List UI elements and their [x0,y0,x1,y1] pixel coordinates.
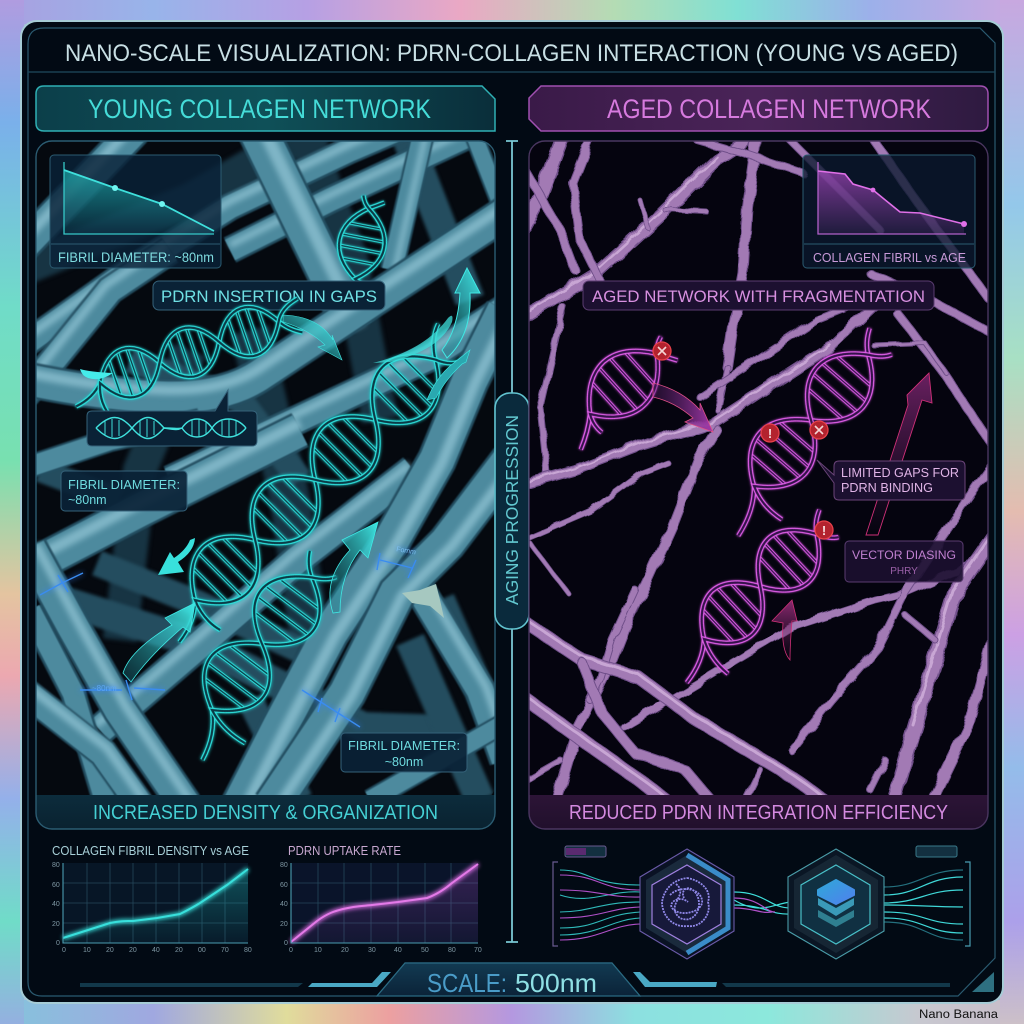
label: limited gaps: LIMITED GAPS FOR [841,466,959,480]
chart: collagen fibril density: 20 [52,921,60,928]
fibril image: dense teal fibres [36,142,494,795]
chart: PDRN uptake rate: 40 [394,947,402,954]
dna: upper left helix [63,290,312,421]
chart: collagen fibril density: COLLAGEN FIBRIL DENSITY vs AGE [52,843,249,858]
chart: collagen fibril density: 40 [52,901,60,908]
chart: PDRN uptake rate [280,843,482,954]
caption: young [36,141,495,829]
label: fibril diameter left [61,471,187,511]
panel: aged collagen network [520,135,995,829]
chart: collagen fibril density: 80 [244,947,252,954]
chart: PDRN uptake rate: 0 [284,940,288,947]
label: limited gaps [817,460,965,500]
caption: aged: REDUCED PDRN INTEGRATION EFFICIENCY [569,802,948,824]
chart: collagen fibril density: 20 [175,947,183,954]
label: vector: VECTOR DIASING [852,548,956,562]
panel header: young [36,86,495,131]
error badges: ! [822,523,826,538]
chart: collagen fibril density: 60 [52,882,60,889]
chart: PDRN uptake rate: 30 [368,947,376,954]
measurement marks: blue: ~80nm [92,684,117,693]
chart: PDRN uptake rate: 60 [280,882,288,889]
panel header: aged [529,86,988,131]
dna: aged helix 3 [653,500,859,698]
label: PDRN insertion [153,281,385,310]
chart: collagen fibril density [52,843,252,954]
chart: PDRN uptake rate: 80 [280,862,288,869]
scale badge: 500nm [515,968,597,998]
dna: aged helix 2 [700,319,914,550]
mini chart: collagen fibril vs age: COLLAGEN FIBRIL vs AGE [813,250,966,265]
label: aged network [583,281,934,310]
dna: lower helix [158,542,361,774]
mini chart: collagen fibril vs age [803,155,975,268]
chart: PDRN uptake rate: 20 [280,921,288,928]
scale badge: SCALE: [427,968,507,998]
chart: PDRN uptake rate: 80 [448,947,456,954]
panel: young collagen network [36,142,494,795]
chart: collagen fibril density: 70 [221,947,229,954]
center timeline: aging progression [495,141,529,942]
label: PDRN insertion: PDRN INSERTION IN GAPS [161,287,377,306]
chart: collagen fibril density: 00 [198,947,206,954]
icon: stacked layers hexagon [788,849,884,959]
fibril image: sparse purple fibres [520,135,995,805]
chart: PDRN uptake rate: PDRN UPTAKE RATE [288,843,401,858]
arrows: aged panel [653,373,932,660]
caption: young: INCREASED DENSITY & ORGANIZATION [93,802,438,824]
chart: collagen fibril density: 0 [56,940,60,947]
diagram: data flow hexagons [553,846,970,959]
error badges [653,342,833,539]
measurement marks: blue: Fomm [396,546,417,556]
dna: aged helix 1 [547,322,687,457]
chart: PDRN uptake rate: 40 [280,901,288,908]
label: aged network: AGED NETWORK WITH FRAGMENTATION [592,287,925,306]
left flow lines [560,870,640,940]
label: vector: PHRY [890,566,918,577]
chart: collagen fibril density: 40 [152,947,160,954]
chart: collagen fibril density: 10 [83,947,91,954]
credit: Nano Banana [919,1009,999,1021]
error badges: ! [768,426,772,441]
mini chart: fibril diameter [50,155,221,268]
chart: PDRN uptake rate: 0 [289,947,293,954]
chart: PDRN uptake rate: 70 [474,947,482,954]
dna: small upper helix [328,193,393,307]
chart: collagen fibril density: 20 [106,947,114,954]
label: fibril diameter bottom: ~80nm [385,755,423,769]
scale badge [377,963,640,998]
dna: central large helix [143,318,482,656]
arrows: young panel [80,268,480,682]
title: NANO-SCALE VISUALIZATION: PDRN-COLLAGEN INTERACTION (YOUNG VS AGED) [65,40,958,67]
label: vector [845,541,963,582]
chart: PDRN uptake rate: 10 [314,947,322,954]
chart: collagen fibril density: 20 [129,947,137,954]
center timeline: aging progression: AGING PROGRESSION [502,415,522,605]
caption: aged [529,141,988,829]
label: fibril diameter left: FIBRIL DIAMETER: [68,478,180,492]
brackets and tags [553,846,970,946]
chart: collagen fibril density: 0 [62,947,66,954]
panel header: young: YOUNG COLLAGEN NETWORK [88,94,431,124]
icon: molecule hexagon [640,849,734,959]
callout: DNA strand [87,390,257,446]
decorative bars [80,972,994,992]
chart: PDRN uptake rate: 50 [421,947,429,954]
chart: PDRN uptake rate: 20 [341,947,349,954]
label: limited gaps: PDRN BINDING [841,481,933,495]
label: fibril diameter bottom: FIBRIL DIAMETER: [348,739,460,753]
chart: collagen fibril density: 80 [52,862,60,869]
label: fibril diameter bottom [341,733,467,772]
label: fibril diameter left: ~80nm [68,493,107,507]
measurement marks: blue [40,546,417,727]
panel header: aged: AGED COLLAGEN NETWORK [607,94,931,124]
mini chart: fibril diameter: FIBRIL DIAMETER: ~80nm [58,250,214,265]
